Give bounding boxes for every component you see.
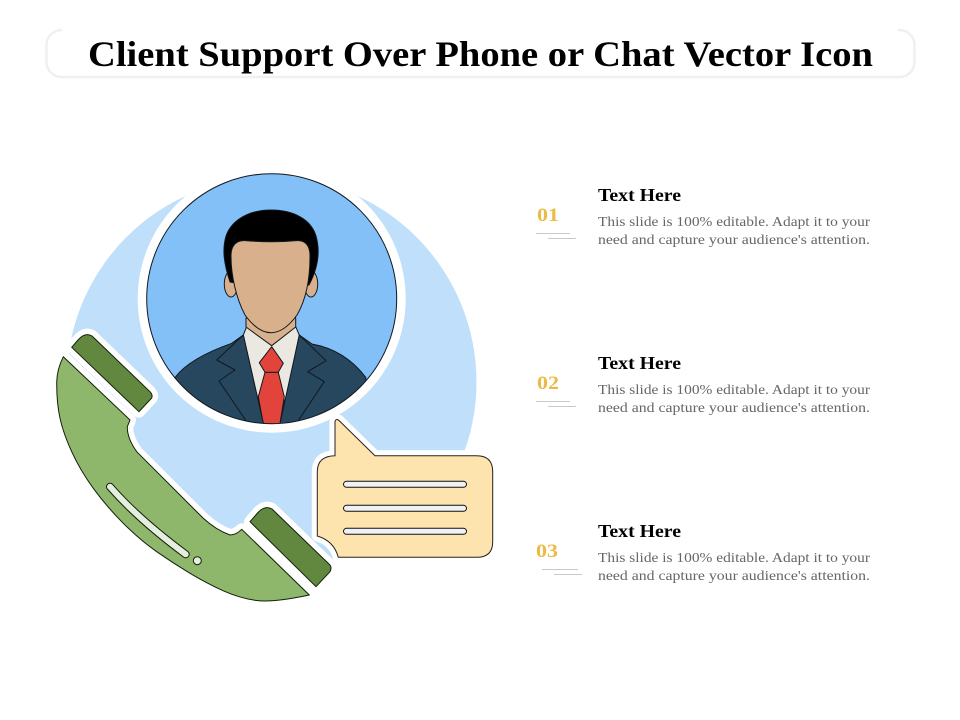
chat line 3	[344, 528, 466, 534]
heading 03: Text Here	[598, 521, 681, 541]
tie	[258, 372, 284, 428]
number 03: 03	[536, 541, 558, 562]
title: Client Support Over Phone or Chat Vector Icon	[88, 34, 873, 74]
avatar background	[147, 174, 397, 424]
background circle	[66, 177, 476, 587]
handset slot	[110, 487, 186, 554]
shirt collar	[243, 327, 299, 400]
handset top cap	[72, 335, 152, 412]
number 01: 01	[537, 205, 559, 226]
title banner	[46, 26, 914, 77]
neck	[246, 318, 296, 346]
left lapel	[217, 335, 264, 426]
description 03: need and capture your audience's attention.	[598, 568, 870, 583]
description 02: This slide is 100% editable. Adapt it to your	[598, 382, 871, 397]
list item 01	[536, 185, 871, 247]
description 01: This slide is 100% editable. Adapt it to your	[598, 214, 871, 229]
illustration: client support icon	[57, 165, 493, 610]
icon: telephone handset	[57, 335, 331, 601]
chat line 1	[344, 481, 466, 487]
heading 01: Text Here	[598, 185, 681, 205]
heading 02: Text Here	[598, 353, 681, 373]
description 01: need and capture your audience's attention.	[598, 232, 870, 247]
ears	[224, 272, 236, 298]
handset dot	[193, 557, 201, 565]
number 02: 02	[537, 373, 559, 394]
list item 02	[536, 353, 871, 415]
description 02: need and capture your audience's attention.	[598, 400, 870, 415]
icon: person avatar	[138, 165, 406, 433]
hair	[224, 210, 318, 290]
suit	[175, 334, 366, 420]
face	[231, 240, 310, 333]
right lapel	[280, 335, 326, 426]
handset bottom cap	[250, 508, 331, 587]
list item 03	[536, 521, 871, 583]
person figure	[170, 210, 372, 430]
chat line 2	[344, 505, 466, 511]
icon: chat bubble	[317, 419, 493, 557]
description 03: This slide is 100% editable. Adapt it to your	[598, 550, 871, 565]
